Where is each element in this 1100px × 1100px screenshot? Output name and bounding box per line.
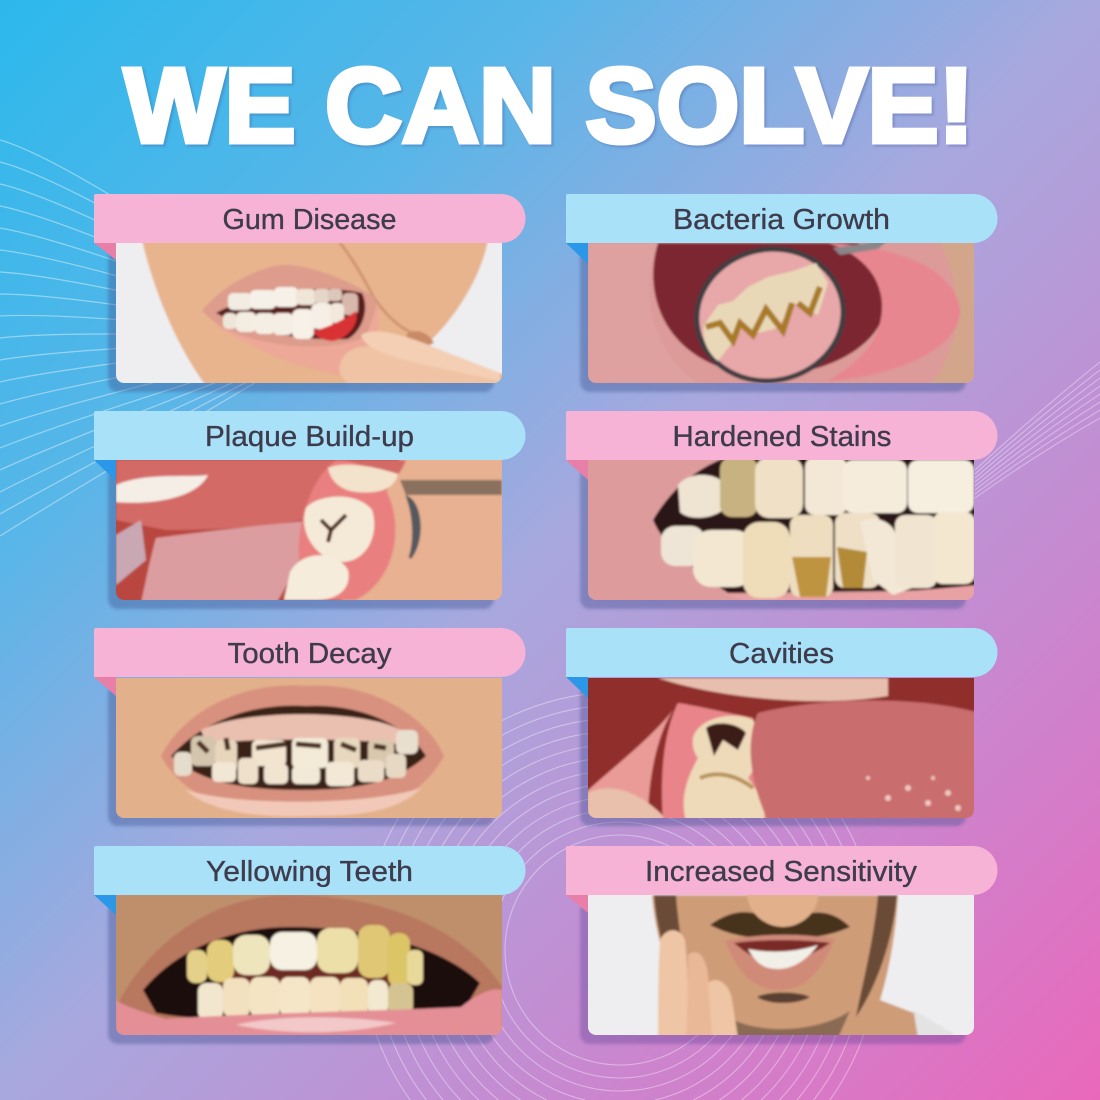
photo: hardened stains <box>585 457 978 603</box>
background line pattern: right band <box>975 362 1100 498</box>
photo: yellowing teeth <box>113 892 505 1038</box>
panel: Hardened Stains <box>566 411 997 609</box>
background line pattern: bottom swirl <box>362 692 878 1100</box>
photo: plaque build-up <box>113 457 506 603</box>
label: Plaque Build-up <box>205 421 414 453</box>
label: Yellowing Teeth <box>206 856 413 888</box>
photo: gum disease <box>113 240 506 386</box>
photo: bacteria growth <box>588 243 974 383</box>
label: Cavities <box>729 638 834 670</box>
label: Gum Disease <box>222 204 396 236</box>
panel: Cavities <box>566 628 998 826</box>
label: Hardened Stains <box>672 421 892 453</box>
title: WE CAN SOLVE! <box>124 47 974 165</box>
background line pattern: left fan <box>0 140 300 536</box>
panel: Bacteria Growth <box>566 194 998 397</box>
label: Increased Sensitivity <box>645 856 917 888</box>
photo: increased sensitivity <box>585 892 977 1038</box>
panel: Tooth Decay <box>94 628 526 826</box>
panel: Gum Disease <box>94 194 526 392</box>
label: Tooth Decay <box>228 638 392 670</box>
label: Bacteria Growth <box>673 204 890 236</box>
photo: tooth decay <box>113 675 505 821</box>
panel: Yellowing Teeth <box>94 846 526 1044</box>
panel: Increased Sensitivity <box>566 846 998 1044</box>
photo: cavities <box>585 675 980 821</box>
panel: Plaque Build-up <box>94 411 525 609</box>
